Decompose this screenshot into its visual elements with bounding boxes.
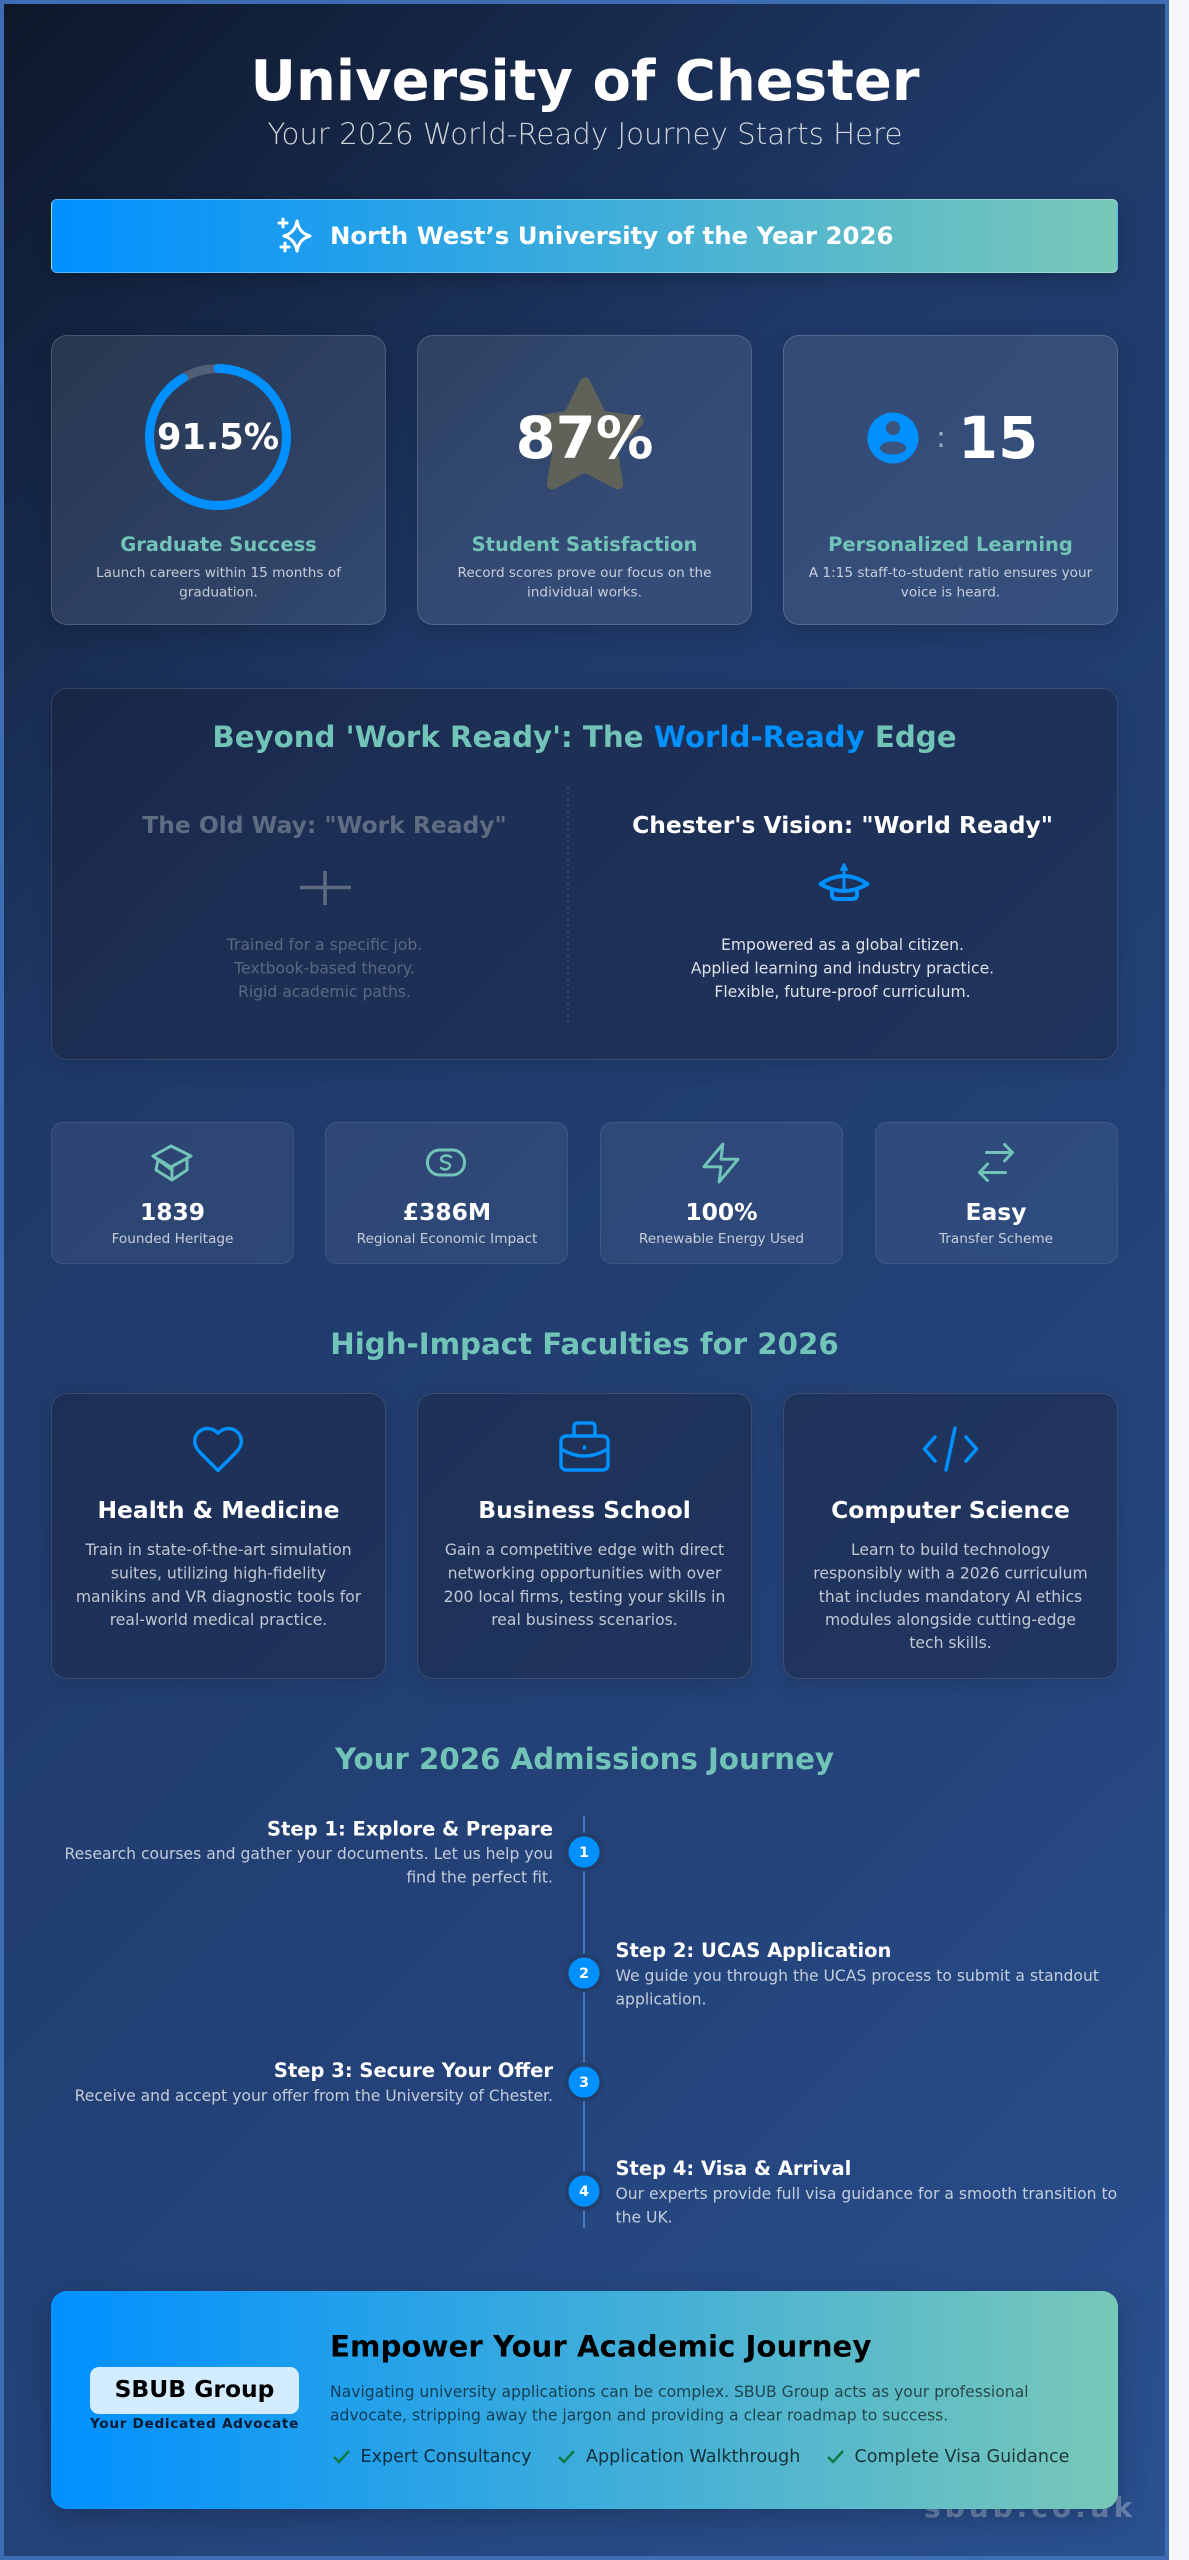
caption: Regional Economic Impact: [357, 1231, 538, 1247]
vision list: Empowered as a global citizen.: [721, 936, 964, 954]
icon: world-ready globe: [820, 864, 868, 899]
title: University of Chester: [251, 49, 920, 114]
call to action panel: SBUB Group: [51, 2291, 1118, 2509]
step 1: [64, 1818, 602, 1886]
icon: code brackets: [924, 1428, 976, 1470]
step 4: Our experts provide full visa guidance for a smooth transition to: [616, 2185, 1117, 2203]
faculty card: health and medicine: [51, 1393, 386, 1679]
step 1: Research courses and gather your documents. Let us help you: [64, 1845, 553, 1863]
feature: application walkthrough: Application Walkthrough: [586, 2447, 800, 2467]
ratio colon: :: [936, 420, 946, 454]
card description: voice is heard.: [901, 584, 1000, 600]
step 1: 1: [579, 1845, 589, 1861]
stat card: graduate success: [51, 335, 386, 625]
step 4: Step 4: Visa & Arrival: [616, 2157, 851, 2180]
card heading: Personalized Learning: [828, 533, 1073, 556]
step 1: Step 1: Explore & Prepare: [267, 1818, 553, 1840]
old way list: [226, 936, 422, 1001]
vision list: Applied learning and industry practice.: [691, 960, 994, 978]
card description: A 1:15 staff-to-student ratio ensures your: [809, 565, 1093, 581]
icon: star behind figure: [532, 383, 638, 484]
description: Navigating university applications can be complex. SBUB Group acts as your professional: [330, 2383, 1029, 2401]
faculty name: Health & Medicine: [97, 1496, 340, 1524]
faculty description: modules alongside cutting-edge: [825, 1611, 1076, 1629]
caption: Founded Heritage: [112, 1231, 233, 1247]
faculty description: suites, utilizing high-fidelity: [111, 1564, 326, 1582]
figure: 15: 15: [958, 405, 1038, 472]
card description: graduation.: [179, 584, 258, 600]
faculty description: real-world medical practice.: [110, 1611, 327, 1629]
caption: Renewable Energy Used: [639, 1231, 804, 1247]
step 4: [566, 2157, 1117, 2226]
icon: graduation cap: [153, 1146, 191, 1180]
card heading: Student Satisfaction: [472, 533, 697, 556]
column: chester's vision: [632, 811, 1053, 1001]
faculty description: Train in state-of-the-art simulation: [84, 1541, 352, 1559]
step 4: the UK.: [616, 2208, 673, 2226]
column: the old way: [142, 811, 507, 1001]
chart: progress ring 91.5%: 91.5%: [157, 417, 279, 458]
icon: transfer arrows: [980, 1144, 1012, 1180]
watermark: sbub.co.uk: [924, 2491, 1136, 2524]
stat card: personalized learning: [783, 335, 1118, 625]
logo: SBUB Group: [89, 2367, 299, 2432]
icon: person: [868, 412, 918, 464]
figure: 1839: [140, 1198, 205, 1226]
panel heading: Beyond 'Work Ready': The World-Ready Edge: [212, 720, 957, 754]
faculty description: tech skills.: [909, 1634, 992, 1652]
timeline: admissions steps: [64, 1816, 1117, 2228]
old way list: Trained for a specific job.: [226, 936, 422, 954]
feature: complete visa guidance: Complete Visa Guidance: [854, 2447, 1069, 2467]
section heading: faculties: High-Impact Faculties for 2026: [330, 1327, 839, 1361]
faculty name: Computer Science: [831, 1496, 1070, 1524]
figure: Easy: [966, 1198, 1026, 1226]
banner text: North West’s University of the Year 2026: [330, 221, 893, 250]
card description: [809, 565, 1093, 600]
vision heading: Chester's Vision: "World Ready": [632, 811, 1053, 839]
step 3: 3: [579, 2075, 589, 2091]
panel: work ready versus world ready: [51, 688, 1118, 1060]
description: advocate, stripping away the jargon and providing a clear roadmap to success.: [330, 2406, 948, 2424]
fact card: economic impact: [325, 1122, 568, 1264]
heading: Empower Your Academic Journey: [330, 2330, 871, 2364]
section heading: admissions journey: Your 2026 Admissions Journey: [334, 1742, 834, 1776]
logo: SBUB Group: SBUB Group: [115, 2375, 274, 2403]
figure: 100%: [685, 1198, 758, 1226]
faculty description: [444, 1541, 725, 1629]
old way heading: The Old Way: "Work Ready": [142, 811, 507, 839]
step 2: We guide you through the UCAS process to submit a standout: [616, 1967, 1099, 1985]
subtitle: Your 2026 World-Ready Journey Starts Here: [267, 117, 903, 151]
card heading: Graduate Success: [120, 533, 317, 556]
step 3: Receive and accept your offer from the University of Chester.: [75, 2087, 553, 2105]
faculty card: computer science: [783, 1393, 1118, 1679]
icon: lightning bolt: [704, 1144, 738, 1182]
award banner: [51, 199, 1118, 273]
faculty description: real business scenarios.: [491, 1611, 678, 1629]
card description: Record scores prove our focus on the: [457, 565, 712, 581]
faculty description: [76, 1541, 362, 1629]
feature: expert consultancy: Expert Consultancy: [360, 2447, 531, 2467]
faculty description: [813, 1541, 1088, 1652]
logo: SBUB Group: Your Dedicated Advocate: [89, 2416, 299, 2432]
caption: Transfer Scheme: [938, 1231, 1053, 1247]
vision list: [691, 936, 994, 1001]
faculty description: Gain a competitive edge with direct: [445, 1541, 724, 1559]
figure: 87%: 87%: [516, 405, 653, 472]
icon: plus: [300, 871, 351, 905]
faculty description: responsibly with a 2026 curriculum: [813, 1564, 1088, 1582]
card description: [96, 565, 342, 600]
faculty description: Learn to build technology: [851, 1541, 1050, 1559]
stat card: student satisfaction: [417, 335, 752, 625]
old way list: Rigid academic paths.: [238, 983, 411, 1001]
step 3: [75, 2059, 602, 2105]
figure: £386M: [403, 1198, 491, 1226]
fact card: transfer scheme: [875, 1122, 1118, 1264]
vision list: Flexible, future-proof curriculum.: [714, 983, 971, 1001]
fact card: founded: [51, 1122, 294, 1264]
old way list: Textbook-based theory.: [233, 960, 415, 978]
step 2: [566, 1939, 1099, 2008]
chart: progress ring 91.5%: [150, 368, 286, 506]
card description: [457, 565, 712, 600]
icon: heart: [195, 1428, 241, 1470]
icon: banknote: [428, 1150, 464, 1175]
description: [330, 2383, 1029, 2424]
step 2: Step 2: UCAS Application: [616, 1939, 891, 1962]
card description: Launch careers within 15 months of: [96, 565, 342, 581]
fact card: renewable energy: [600, 1122, 843, 1264]
card description: individual works.: [527, 584, 642, 600]
faculty description: that includes mandatory AI ethics: [819, 1588, 1082, 1606]
faculty card: business school: [417, 1393, 752, 1679]
step 4: 4: [579, 2184, 589, 2200]
faculty name: Business School: [478, 1496, 691, 1524]
header: title and subtitle: [251, 49, 920, 151]
faculty description: networking opportunities with over: [448, 1564, 722, 1582]
step 3: Step 3: Secure Your Offer: [274, 2059, 553, 2082]
step 2: application.: [616, 1990, 706, 2008]
faculty description: 200 local firms, testing your skills in: [444, 1588, 725, 1606]
step 1: find the perfect fit.: [406, 1868, 553, 1886]
icon: sparkles: [279, 219, 310, 251]
step 2: 2: [579, 1966, 589, 1982]
faculty description: manikins and VR diagnostic tools for: [76, 1588, 362, 1606]
icon: briefcase: [561, 1423, 608, 1470]
